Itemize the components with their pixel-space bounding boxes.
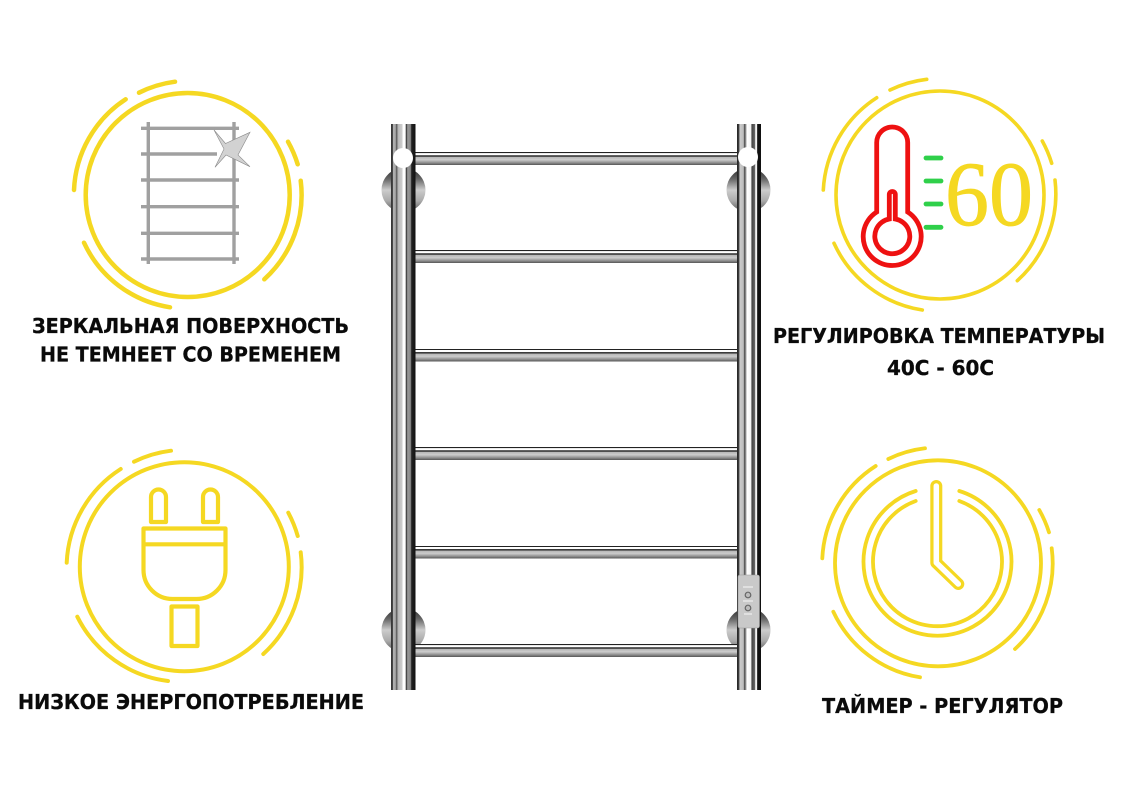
left upright xyxy=(391,124,416,690)
icon: thermometer 60: 60 xyxy=(945,143,1033,245)
top joints xyxy=(393,147,758,168)
heating controller xyxy=(738,575,760,628)
panel: mirror surface feature xyxy=(32,82,349,366)
icon: mirror surface xyxy=(74,82,302,307)
icon: thermometer 60 xyxy=(823,79,1056,310)
caption: temperature regulation xyxy=(773,324,1105,380)
wall mounts xyxy=(382,168,770,652)
caption: timer regulator: ТАЙМЕР - РЕГУЛЯТОР xyxy=(822,694,1063,718)
panel: low power feature xyxy=(18,451,364,714)
panel: timer feature xyxy=(822,448,1063,718)
crossbars xyxy=(413,152,739,657)
caption: temperature regulation: РЕГУЛИРОВКА ТЕМПЕРАТУРЫ xyxy=(773,324,1105,348)
caption: mirror surface: НЕ ТЕМНЕЕТ СО ВРЕМЕНЕМ xyxy=(40,342,341,366)
product: towel rail xyxy=(382,124,770,690)
panel: temperature regulation feature xyxy=(773,79,1105,380)
icon: timer clock xyxy=(822,448,1053,677)
caption: mirror surface: ЗЕРКАЛЬНАЯ ПОВЕРХНОСТЬ xyxy=(32,314,349,338)
icon: plug xyxy=(67,451,302,681)
caption: low power consumption: НИЗКОЕ ЭНЕРГОПОТРЕБЛЕНИЕ xyxy=(18,690,364,714)
caption: mirror surface xyxy=(32,314,349,366)
caption: temperature regulation: 40С - 60С xyxy=(887,356,994,380)
right upright xyxy=(737,124,761,690)
